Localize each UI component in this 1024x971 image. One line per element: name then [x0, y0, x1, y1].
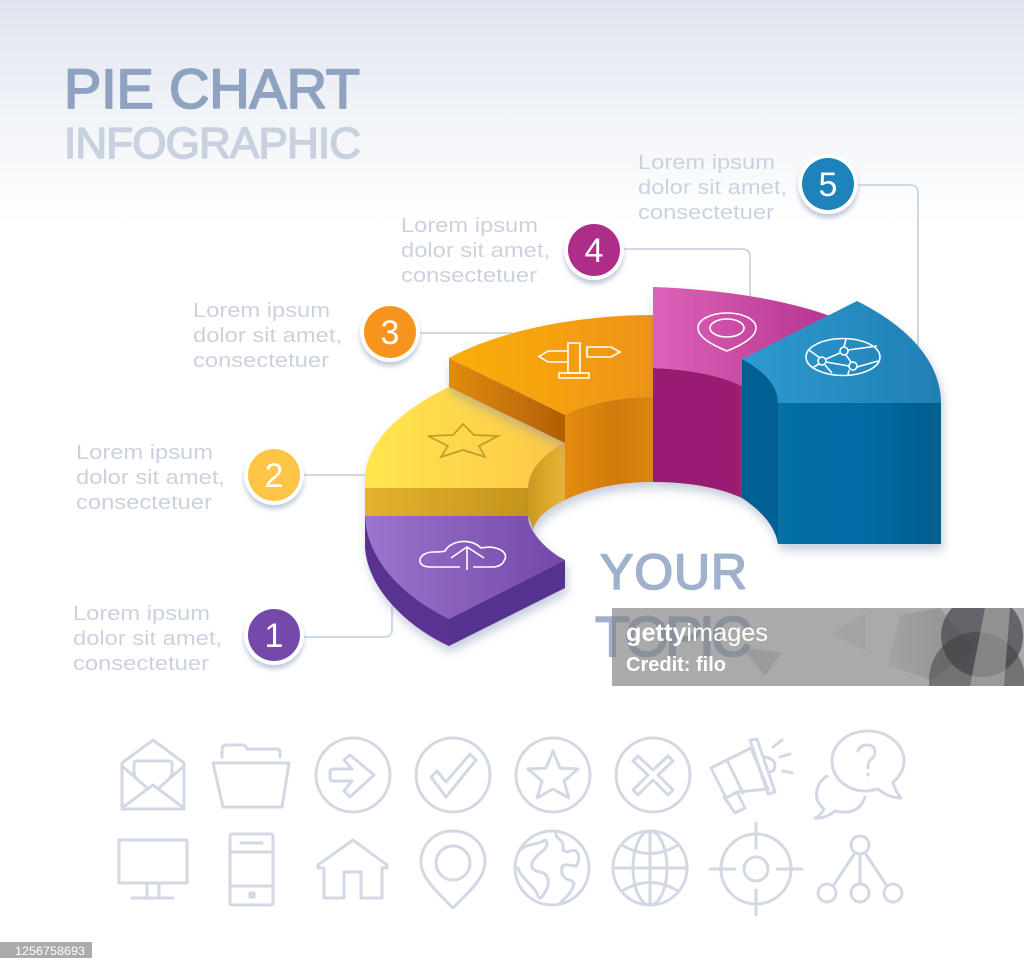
label 1: Lorem ipsum — [73, 603, 210, 625]
icon: megaphone — [711, 739, 792, 813]
icon: monitor — [119, 840, 187, 898]
label 5: dolor sit amet, — [638, 177, 787, 199]
image id tag — [0, 942, 92, 958]
icon: star — [428, 424, 498, 457]
label 1: consectetuer — [73, 653, 209, 675]
icon: envelope — [122, 740, 184, 809]
title — [64, 57, 361, 168]
center text: your topic: YOUR — [600, 544, 747, 600]
icon: arrow circle — [316, 738, 390, 812]
center text: your topic: TOPIC — [595, 605, 752, 669]
label 5: Lorem ipsum — [638, 152, 775, 174]
label 1: dolor sit amet, — [73, 628, 222, 650]
number badge 4: 4 — [585, 232, 603, 270]
segment 1: purple — [365, 516, 565, 646]
segment 2: yellow — [365, 387, 565, 530]
icon: target — [710, 823, 802, 915]
icon: map pin — [421, 831, 485, 908]
background gradient — [0, 0, 1024, 225]
segment 4: magenta — [653, 287, 830, 498]
number badge 2: 2 — [265, 457, 283, 495]
icon: question speech bubbles — [815, 731, 904, 818]
icon: earth globe — [515, 831, 589, 905]
icon: folder — [213, 745, 289, 807]
label 3 — [193, 300, 342, 372]
label 4 — [401, 215, 550, 287]
number badge 5 — [798, 154, 858, 214]
label 4: consectetuer — [401, 265, 537, 287]
icon: house — [318, 840, 387, 898]
watermark banner: Credit: filo — [626, 654, 726, 676]
label 3: Lorem ipsum — [193, 300, 330, 322]
number badge 4 — [564, 220, 624, 280]
icon row 2 — [119, 823, 902, 915]
number badge 5: 5 — [819, 166, 837, 204]
title: PIE CHART — [64, 57, 360, 120]
number badge 3: 3 — [381, 314, 399, 352]
image id tag: 1256758693 — [15, 944, 85, 958]
icon row 1 — [122, 731, 904, 818]
label 2: Lorem ipsum — [76, 442, 213, 464]
icon: smartphone — [230, 834, 273, 905]
segment 5: blue — [742, 301, 941, 544]
icon: check circle — [416, 738, 490, 812]
3D pie chart — [365, 287, 941, 646]
title: INFOGRAPHIC — [64, 119, 361, 168]
label 5 — [638, 152, 787, 224]
icon: cross circle — [616, 738, 690, 812]
number badge 1: 1 — [265, 617, 283, 655]
number badge 2 — [244, 445, 304, 505]
center text: your topic — [595, 544, 752, 669]
icon: signpost — [539, 343, 620, 378]
number badge 3 — [360, 302, 420, 362]
icon: network globe — [806, 338, 880, 376]
watermark banner — [612, 608, 1024, 686]
icon: location pin — [698, 313, 756, 351]
label 4: Lorem ipsum — [401, 215, 538, 237]
label 5: consectetuer — [638, 202, 774, 224]
label 2: dolor sit amet, — [76, 467, 225, 489]
connector lines — [300, 185, 918, 637]
icon: upload cloud — [420, 541, 505, 570]
label 2: consectetuer — [76, 492, 212, 514]
number badge 1 — [244, 605, 304, 665]
label 3: consectetuer — [193, 350, 329, 372]
label 2 — [76, 442, 225, 514]
icon: wire globe — [613, 831, 687, 905]
label 1 — [73, 603, 222, 675]
icon: star circle — [516, 738, 590, 812]
icon: network — [818, 836, 902, 902]
segment 3: orange — [449, 315, 653, 500]
label 3: dolor sit amet, — [193, 325, 342, 347]
watermark banner: gettyimages — [626, 619, 768, 647]
label 4: dolor sit amet, — [401, 240, 550, 262]
